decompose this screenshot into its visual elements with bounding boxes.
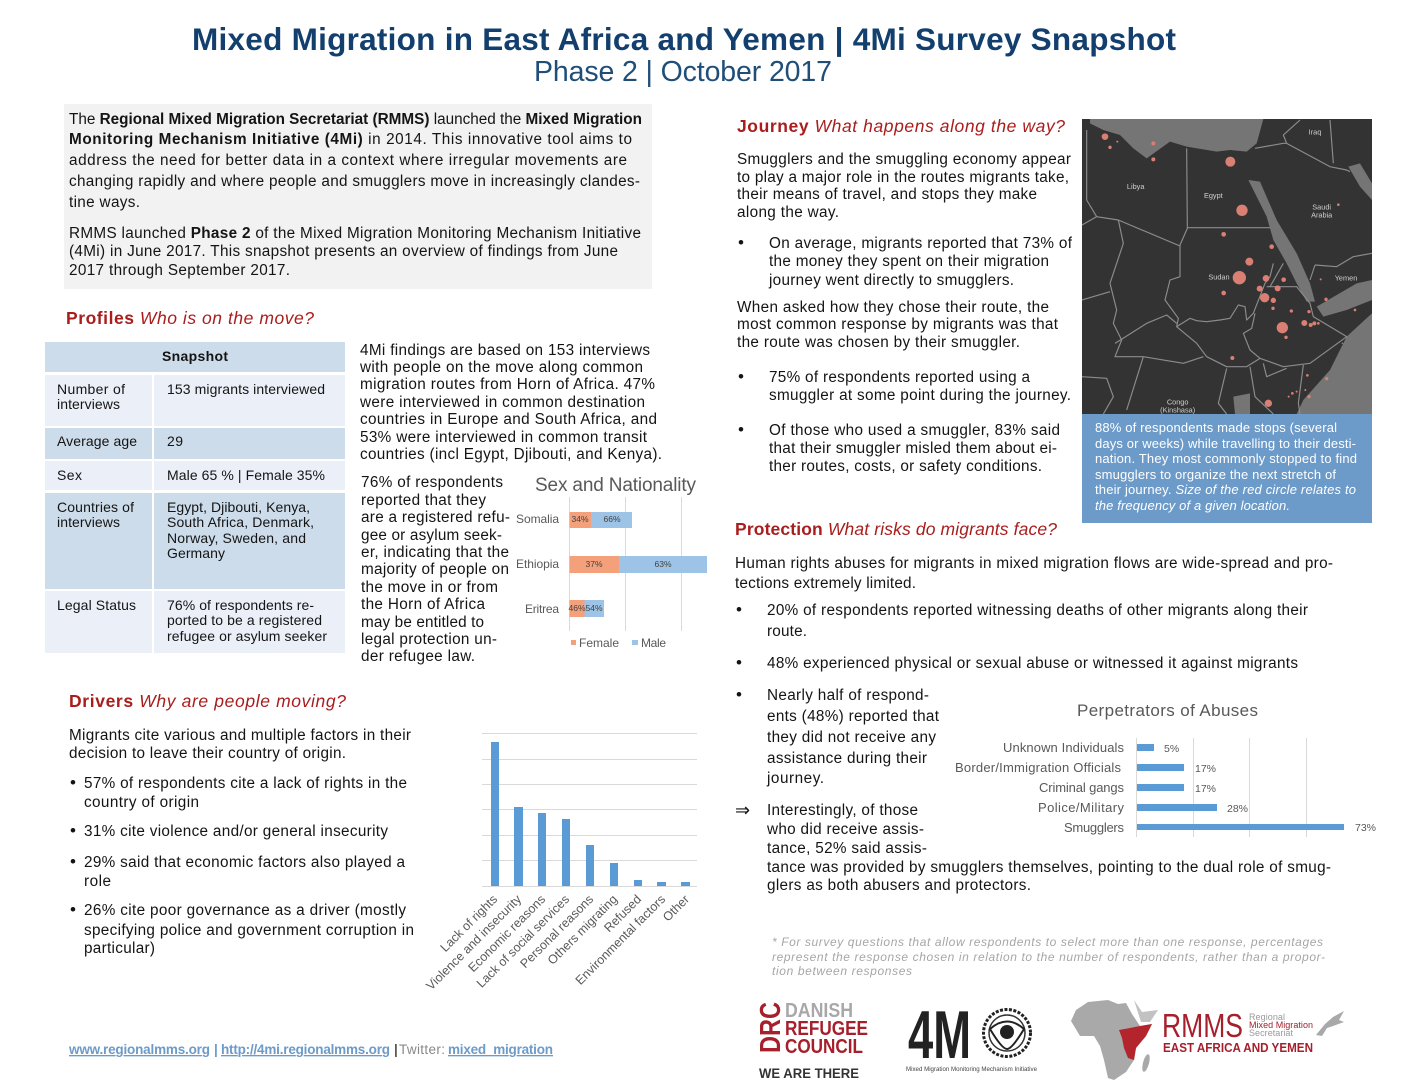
logo: Danish Refugee Council: DRC — [755, 1002, 787, 1053]
title — [192, 21, 1176, 88]
heading: drivers: Drivers Why are people moving? — [69, 691, 346, 711]
footer links — [68, 1042, 553, 1057]
map caption: their journey. Size of the red circle relates to — [1095, 482, 1356, 497]
text block: legal protection: er, indicating that the — [361, 544, 509, 561]
text block: protection: tections extremely limited. — [735, 575, 916, 592]
chart: drivers of migration: Environmental factors — [573, 892, 668, 988]
table: snapshot: Countries of — [57, 499, 134, 515]
chart: perpetrators of abuses: Perpetrators of Abuses — [1077, 701, 1258, 720]
table: snapshot — [45, 342, 345, 653]
text block: drivers: 57% of respondents cite a lack of rights in the — [84, 775, 407, 792]
text block: drivers: • — [70, 852, 76, 871]
text block: journey: • — [738, 233, 744, 252]
chart: perpetrators of abuses: 17% — [1195, 783, 1216, 795]
footnote — [772, 935, 1325, 978]
table: snapshot: Norway, Sweden, and — [167, 530, 306, 546]
chart: perpetrators of abuses: 5% — [1164, 743, 1179, 755]
text block: protection: 20% of respondents reported witnessing deaths of other migrants along their — [767, 602, 1308, 619]
table: snapshot: interviews — [57, 396, 120, 412]
chart: drivers of migration: Other — [660, 892, 692, 924]
text block: findings: were interviewed in common destination — [359, 394, 645, 411]
chart: sex and nationality: 66% — [603, 514, 621, 524]
text block: protection: glers as both abusers and protectors. — [767, 877, 1031, 894]
heading: profiles: Profiles Who is on the move? — [66, 308, 314, 328]
text block: journey: to play a major role in the routes migrants take, — [737, 169, 1069, 186]
text block: protection: • — [736, 600, 742, 619]
footer links: | — [214, 1042, 218, 1057]
text block: drivers: 26% cite poor governance as a driver (mostly — [84, 902, 406, 919]
text block: findings: migration routes from Horn of Africa. 47% — [360, 376, 655, 393]
heading: protection: Protection What risks do migrants face? — [735, 519, 1057, 539]
chart: perpetrators of abuses: 17% — [1195, 763, 1216, 775]
chart: drivers of migration: Lack of social services — [474, 892, 572, 991]
chart: sex and nationality: 34% — [571, 514, 589, 524]
logo: Danish Refugee Council: REFUGEE — [785, 1018, 868, 1040]
text block: findings: 53% were interviewed in common transit — [360, 429, 648, 446]
map: stops along the route: Arabia — [1311, 210, 1333, 219]
text block: drivers: • — [70, 900, 76, 919]
panel: introduction: tine ways. — [69, 194, 140, 211]
table: snapshot: Number of — [57, 381, 125, 397]
text block: legal protection: gee or asylum seek- — [361, 527, 502, 544]
text block: protection: assistance during their — [767, 750, 927, 767]
logo: RMMS: Regional — [1249, 1012, 1285, 1022]
logo: Danish Refugee Council: WE ARE THERE — [759, 1066, 859, 1081]
chart: sex and nationality — [516, 475, 707, 650]
text block: journey: the money they spent on their migration — [769, 253, 1049, 270]
map: stops along the route: Saudi — [1312, 203, 1331, 212]
chart: sex and nationality: Eritrea — [525, 602, 559, 616]
footer links: http://4mi.regionalmms.org — [221, 1042, 390, 1057]
table: snapshot: refugee or asylum seeker — [167, 628, 327, 644]
text block: protection: they did not receive any — [767, 729, 936, 746]
chart: perpetrators of abuses: Criminal gangs — [1039, 780, 1124, 795]
footer links: Twitter: — [399, 1042, 445, 1057]
chart: perpetrators of abuses: 73% — [1355, 822, 1376, 834]
panel: introduction: changing rapidly and where people and smugglers move in increasingly clandes- — [69, 173, 640, 190]
chart: perpetrators of abuses: Smugglers — [1064, 820, 1124, 835]
text block: journey: • — [738, 420, 744, 439]
map: stops along the route: Yemen — [1335, 274, 1357, 283]
text block: drivers: country of origin — [84, 794, 199, 811]
map: stops along the route: Egypt — [1204, 191, 1223, 200]
panel: introduction: 2017 through September 2017. — [69, 262, 290, 279]
text block: findings: 4Mi findings are based on 153 interviews — [360, 342, 650, 359]
text block: drivers: 31% cite violence and/or general insecurity — [84, 823, 388, 840]
text block: journey — [737, 151, 1073, 475]
map caption: nation. They most commonly stopped to find — [1095, 451, 1357, 466]
text block: journey: most common response by migrants was that — [737, 316, 1059, 333]
logo: RMMS: Mixed Migration — [1249, 1020, 1313, 1030]
chart: drivers of migration: Others migrating — [545, 892, 620, 967]
text block: journey: • — [738, 367, 744, 386]
table: snapshot: Male 65 % | Female 35% — [167, 467, 325, 483]
chart: drivers of migration: Lack of rights — [438, 892, 500, 955]
text block: legal protection: may be entitled to — [361, 614, 484, 631]
text block: protection: Nearly half of respond- — [767, 687, 929, 704]
chart: perpetrators of abuses: Border/Immigration Officials — [955, 760, 1122, 775]
map: stops along the route: Sudan — [1208, 273, 1230, 282]
panel: introduction: Monitoring Mechanism Initiative (4Mi) in 2014. This innovative tool aims to — [69, 131, 632, 148]
text block: legal protection: reported that they — [361, 492, 486, 509]
chart: drivers of migration: Violence and insecurity — [423, 892, 525, 993]
map caption — [1082, 414, 1372, 523]
panel: introduction: (4Mi) in June 2017. This snapshot presents an overview of findings from June — [69, 243, 618, 260]
logo: RMMS — [1071, 1000, 1344, 1080]
text block: journey: their means of travel, and stops they make — [737, 186, 1037, 203]
text block: protection: Interestingly, of those — [767, 802, 918, 819]
logo: 4Mi: Mixed Migration Monitoring Mechanism Initiative — [906, 1066, 1037, 1073]
text block: drivers: particular) — [84, 940, 155, 957]
text block: legal protection: der refugee law. — [361, 648, 475, 665]
text block: journey: journey went directly to smugglers. — [768, 272, 1014, 289]
text block: journey: When asked how they chose their route, the — [737, 299, 1049, 316]
map caption: the frequency of a given location. — [1095, 498, 1290, 513]
text block: protection: 48% experienced physical or sexual abuse or witnessed it against migrants — [767, 655, 1298, 672]
text block: protection: • — [736, 653, 742, 672]
table: snapshot: interviews — [57, 514, 120, 530]
footer links: | — [394, 1042, 398, 1057]
text block: findings — [359, 342, 662, 463]
text block: journey: smuggler at some point during the journey. — [769, 387, 1071, 404]
text block: protection: journey. — [766, 770, 824, 787]
text block: findings: with people on the move along common — [359, 359, 643, 376]
map: stops along the route — [1082, 119, 1372, 414]
table: snapshot: Snapshot — [162, 348, 228, 364]
table: snapshot: 29 — [167, 433, 183, 449]
text block: legal protection: legal protection un- — [361, 631, 497, 648]
chart: perpetrators of abuses: Police/Military — [1038, 800, 1124, 815]
subtitle: Phase 2 | October 2017 — [534, 56, 832, 88]
text block: journey: On average, migrants reported that 73% of — [769, 235, 1073, 252]
text block: drivers: Migrants cite various and multiple factors in their — [69, 727, 411, 744]
map: stops along the route: Libya — [1127, 182, 1145, 191]
panel: introduction: RMMS launched Phase 2 of the Mixed Migration Monitoring Mechanism Initiative — [69, 225, 641, 242]
text block: journey: Smugglers and the smuggling economy appear — [737, 151, 1071, 168]
text block: journey: the route was chosen by their smuggler. — [737, 334, 1020, 351]
map: stops along the route: (Kinshasa) — [1160, 405, 1195, 414]
chart: sex and nationality: 46% — [568, 603, 586, 613]
map: stops along the route: Congo — [1167, 398, 1188, 407]
text block: legal protection — [361, 474, 510, 665]
chart: perpetrators of abuses: Unknown Individuals — [1003, 740, 1124, 755]
panel: introduction — [64, 104, 652, 289]
logo: RMMS: EAST AFRICA AND YEMEN — [1163, 1041, 1313, 1055]
text block: legal protection: 76% of respondents — [361, 474, 503, 491]
table: snapshot: Legal Status — [57, 597, 136, 613]
title: Mixed Migration in East Africa and Yemen | 4Mi Survey Snapshot — [192, 21, 1176, 57]
logo: Danish Refugee Council: COUNCIL — [785, 1036, 863, 1058]
chart: drivers of migration: Personal reasons — [517, 892, 596, 971]
text block: findings: countries in Europe and South Africa, and — [360, 411, 657, 428]
text block: protection: ents (48%) reported that — [767, 708, 940, 725]
text block: legal protection: the move in or from — [361, 579, 498, 596]
panel: introduction: address the need for better data in a context where irregular movements are — [69, 152, 627, 169]
logo: Danish Refugee Council: DANISH — [785, 1000, 853, 1022]
chart: sex and nationality: 37% — [585, 559, 603, 569]
chart: perpetrators of abuses: 28% — [1227, 803, 1248, 815]
text block: protection: who did receive assis- — [766, 821, 924, 838]
map caption: 88% of respondents made stops (several — [1095, 420, 1337, 435]
table: snapshot: 76% of respondents re- — [167, 597, 314, 613]
chart: drivers of migration: Economic reasons — [466, 892, 548, 975]
map caption: smugglers to organize the next stretch of — [1095, 467, 1336, 482]
text block: drivers: decision to leave their country of origin. — [69, 745, 346, 762]
map caption: days or weeks) while travelling to their desti- — [1095, 436, 1356, 451]
text block: findings: countries (incl Egypt, Djibouti, and Kenya). — [360, 446, 662, 463]
chart: sex and nationality: Female — [579, 636, 619, 650]
table: snapshot: Egypt, Djibouti, Kenya, — [167, 499, 310, 515]
text block: journey: ther routes, costs, or safety conditions. — [769, 458, 1042, 475]
text block: drivers: 29% said that economic factors also played a — [84, 854, 405, 871]
footnote: represent the response chosen in relation to the number of respondents, rather than a propor- — [772, 950, 1325, 964]
chart: sex and nationality: 54% — [585, 603, 603, 613]
chart: sex and nationality: Ethiopia — [516, 557, 559, 571]
table: snapshot: Sex — [57, 467, 82, 483]
text block: protection: tance, 52% said assis- — [767, 840, 927, 857]
text block: journey: Of those who used a smuggler, 83% said — [769, 422, 1060, 439]
text block: protection: route. — [767, 623, 807, 640]
text block: protection: tance was provided by smugglers themselves, pointing to the dual role of smug- — [767, 859, 1331, 876]
table: snapshot: Average age — [57, 433, 137, 449]
table: snapshot: ported to be a registered — [167, 612, 322, 628]
text block: protection: Human rights abuses for migrants in mixed migration flows are wide-spread and pro- — [735, 555, 1333, 572]
text block: legal protection: are a registered refu- — [361, 509, 510, 526]
logo: RMMS: RMMS — [1162, 1007, 1243, 1044]
footnote: * For survey questions that allow respondents to select more than one response, percentages — [772, 935, 1323, 949]
text block: journey: 75% of respondents reported using a — [769, 369, 1030, 386]
chart: sex and nationality: Male — [641, 636, 666, 650]
panel: introduction: The Regional Mixed Migration Secretariat (RMMS) launched the Mixed Migration — [69, 111, 642, 128]
heading: journey: Journey What happens along the way? — [737, 116, 1065, 136]
table: snapshot: Germany — [167, 545, 225, 561]
footer links: mixed_migration — [448, 1042, 553, 1057]
text block: journey: along the way. — [737, 204, 839, 221]
text block: journey: that their smuggler misled them about ei- — [769, 440, 1057, 457]
chart: sex and nationality: Sex and Nationality — [535, 475, 696, 496]
text block: protection: • — [736, 685, 742, 704]
table: snapshot: South Africa, Denmark, — [167, 514, 314, 530]
chart: sex and nationality: Somalia — [516, 512, 559, 526]
logo: Danish Refugee Council — [755, 1000, 868, 1081]
text block: drivers — [69, 727, 414, 957]
logo: 4Mi: 4M — [908, 997, 971, 1073]
text block: legal protection: majority of people on — [361, 561, 509, 578]
chart: drivers of migration: Refused — [601, 892, 644, 935]
chart: perpetrators of abuses — [955, 701, 1376, 837]
chart: sex and nationality: 63% — [654, 559, 672, 569]
logo: RMMS: Secretariat — [1249, 1028, 1293, 1038]
map: stops along the route: Iraq — [1309, 128, 1321, 137]
table: snapshot: 153 migrants interviewed — [167, 381, 325, 397]
arrow: ⇒ — [735, 800, 750, 821]
text block: drivers: • — [70, 821, 76, 840]
text block: drivers: • — [70, 773, 76, 792]
chart: drivers of migration — [423, 734, 697, 993]
text block: drivers: role — [84, 873, 111, 890]
footnote: tion between responses — [772, 964, 912, 978]
footer links: www.regionalmms.org — [68, 1042, 210, 1057]
text block: protection — [735, 555, 1333, 894]
text block: legal protection: the Horn of Africa — [361, 596, 485, 613]
text block: drivers: specifying police and government corruption in — [84, 922, 414, 939]
